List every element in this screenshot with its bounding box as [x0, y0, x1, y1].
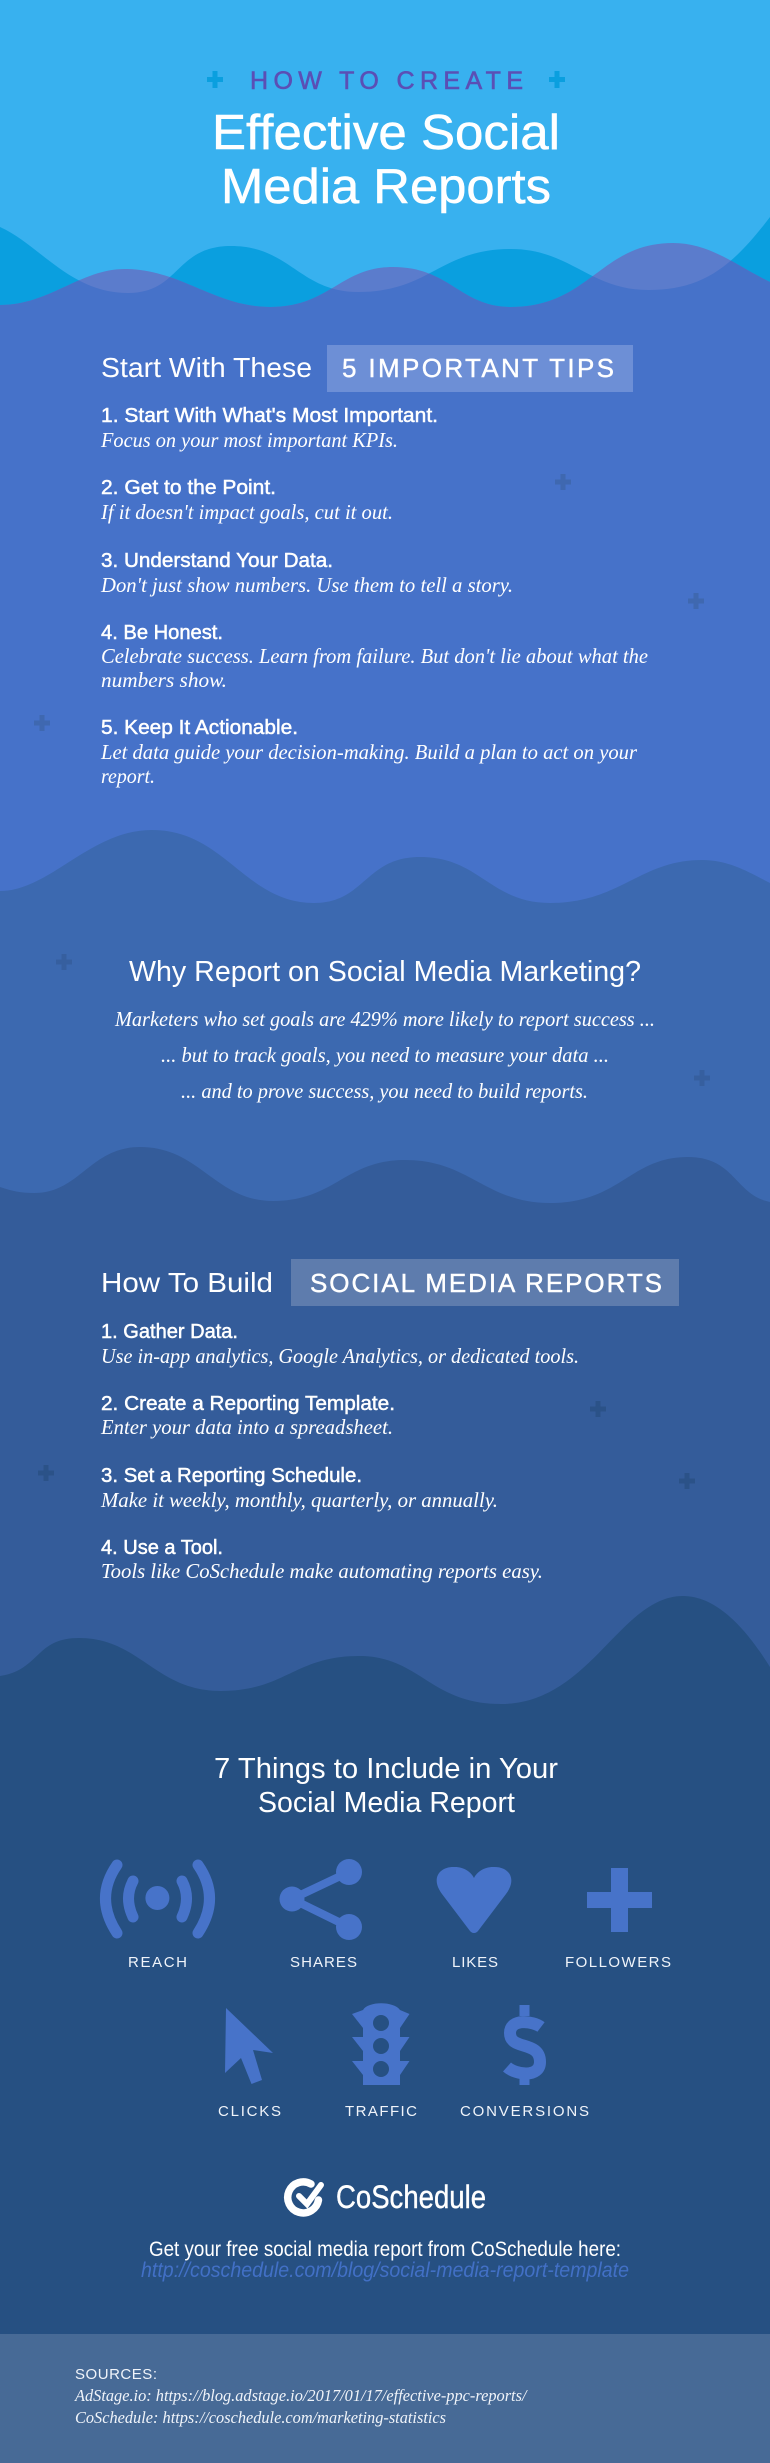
tip 5: 5. Keep It Actionable. [101, 716, 298, 739]
icon: plus right [549, 71, 565, 88]
build heading: How To Build [101, 1267, 273, 1298]
wave overlap body [0, 260, 770, 903]
wave background [0, 830, 770, 1300]
tip 5: report. [101, 764, 155, 788]
step 2: 2. Create a Reporting Template. [101, 1392, 395, 1415]
panel: tips [0, 243, 770, 903]
icon: traffic [352, 2003, 410, 2085]
seven things heading [214, 1753, 558, 1819]
panel: seven things [0, 1596, 770, 2340]
tip 4: 4. Be Honest. [101, 621, 223, 644]
highlight box: tips: 5 IMPORTANT TIPS [342, 353, 614, 383]
tip 3 [100, 549, 513, 597]
eyebrow heading: HOW TO CREATE [250, 67, 523, 95]
panel: why report [0, 830, 770, 1300]
back wave [0, 217, 770, 340]
why text: ... but to track goals, you need to measure your data ... [161, 1043, 609, 1067]
sources list [74, 2386, 529, 2427]
tip 4 [101, 621, 648, 692]
step 2 [100, 1392, 395, 1439]
front wave section background [0, 243, 770, 1000]
step 3: Make it weekly, monthly, quarterly, or annually. [100, 1488, 498, 1512]
title: Media Reports [221, 160, 551, 214]
step 1: 1. Gather Data. [101, 1320, 238, 1343]
label: clicks: CLICKS [218, 2103, 281, 2120]
label: conversions: CONVERSIONS [460, 2103, 589, 2120]
tip 4: Celebrate success. Learn from failure. But don't lie about what the [101, 644, 648, 668]
tip 3: Don't just show numbers. Use them to tell a story. [100, 573, 513, 597]
seven things heading: 7 Things to Include in Your [214, 1753, 558, 1785]
icon: clicks [225, 2008, 273, 2084]
step 3 [100, 1464, 498, 1512]
step 4: Tools like CoSchedule make automating reports easy. [101, 1559, 543, 1583]
call to action: Get your free social media report from CoSchedule here: [149, 2238, 621, 2261]
highlight box: build [291, 1259, 679, 1306]
label: reach: REACH [128, 1954, 187, 1971]
seven things heading: Social Media Report [258, 1787, 515, 1819]
step 1: Use in-app analytics, Google Analytics, or dedicated tools. [101, 1344, 579, 1368]
title: Effective Social [212, 106, 560, 160]
tip 5 [100, 716, 638, 788]
step 4: 4. Use a Tool. [101, 1536, 223, 1559]
why text: Marketers who set goals are 429% more likely to report success ... [114, 1007, 655, 1031]
icon: plus left [207, 71, 223, 88]
step 4 [101, 1536, 543, 1583]
sources list: CoSchedule: https://coschedule.com/marketing-statistics [75, 2408, 446, 2427]
step 3: 3. Set a Reporting Schedule. [101, 1464, 362, 1487]
logo: CoSchedule: CoSchedule [336, 2179, 486, 2215]
label: shares: SHARES [290, 1954, 357, 1971]
panel: sources [0, 2334, 770, 2463]
tip 2 [100, 476, 393, 524]
icon: followers [587, 1868, 652, 1932]
why text [114, 1007, 655, 1103]
icon: shares [280, 1859, 362, 1940]
tip 4: numbers show. [101, 668, 227, 692]
icon: plus marks [38, 1401, 695, 1489]
tip 2: 2. Get to the Point. [101, 476, 276, 499]
tip 5: Let data guide your decision-making. Build a plan to act on your [100, 740, 638, 764]
logo: CoSchedule [288, 2179, 486, 2215]
why heading: Why Report on Social Media Marketing? [129, 956, 641, 988]
sources list: AdStage.io: https://blog.adstage.io/2017/01/17/effective-ppc-reports/ [74, 2386, 529, 2405]
tip 1: Focus on your most important KPIs. [100, 428, 398, 452]
tip 3: 3. Understand Your Data. [101, 549, 333, 572]
tip 2: If it doesn't impact goals, cut it out. [100, 500, 393, 524]
highlight box: tips [327, 345, 633, 392]
sources heading: SOURCES: [75, 2366, 157, 2383]
step 1 [101, 1320, 579, 1368]
wave background [0, 1147, 770, 1800]
tip 1: 1. Start With What's Most Important. [101, 404, 438, 427]
panel: how to build [0, 1147, 770, 1800]
link: http://coschedule.com/blog/social-media-report-template [141, 2259, 629, 2282]
icon: reach [106, 1865, 210, 1933]
step 2: Enter your data into a spreadsheet. [100, 1415, 393, 1439]
icon: likes [437, 1867, 511, 1933]
why text: ... and to prove success, you need to build reports. [181, 1079, 588, 1103]
tips heading: Start With These [101, 352, 312, 383]
label: likes: LIKES [452, 1954, 498, 1971]
tip 1 [100, 404, 438, 452]
panel: header [0, 0, 770, 340]
icon: conversions [507, 2005, 541, 2085]
icon: plus marks [56, 954, 710, 1086]
icon: plus marks [34, 474, 704, 731]
highlight box: build: SOCIAL MEDIA REPORTS [310, 1268, 662, 1298]
wave background [0, 1596, 770, 2340]
label: traffic: TRAFFIC [345, 2103, 417, 2120]
label: followers: FOLLOWERS [565, 1954, 671, 1971]
title [212, 106, 560, 214]
